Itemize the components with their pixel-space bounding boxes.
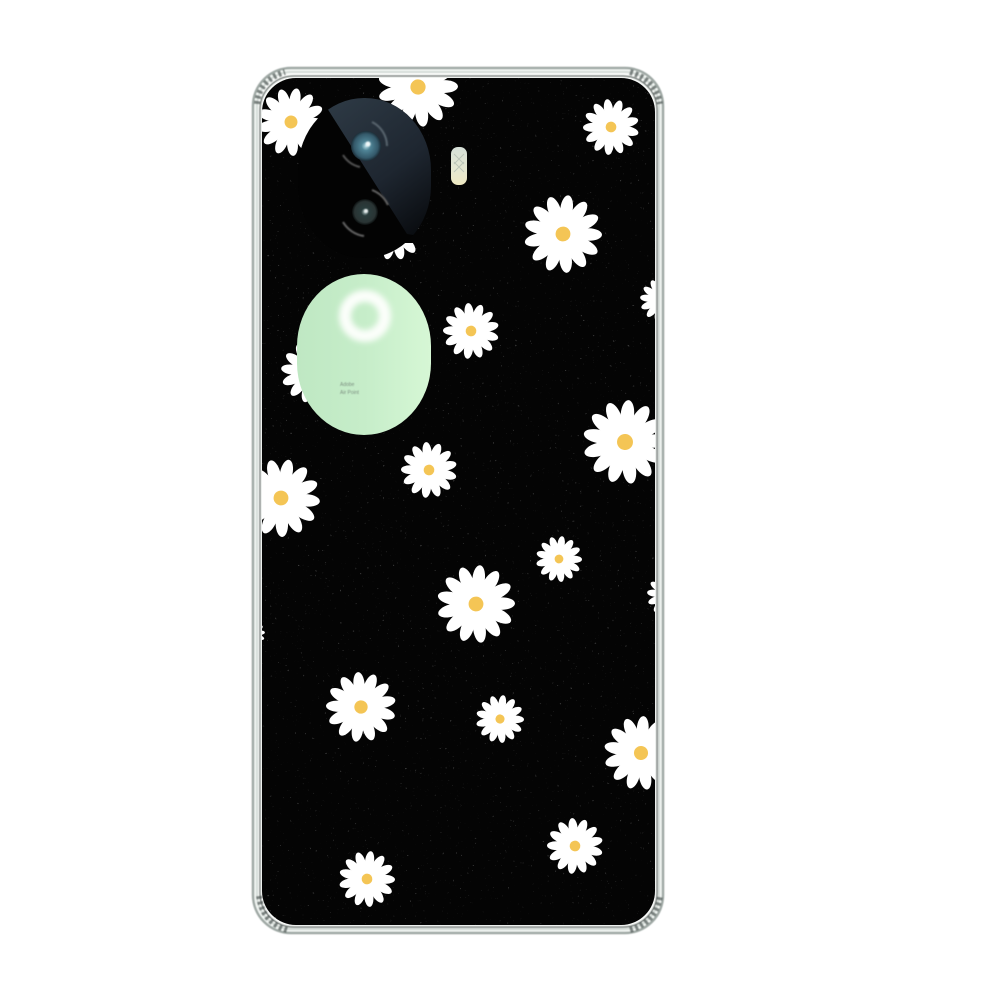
daisy under green disc — [281, 344, 308, 402]
green oval module — [297, 274, 431, 435]
tiny module text: Air Point — [340, 390, 360, 396]
upper lens — [343, 122, 387, 167]
glowing ring — [345, 296, 385, 336]
daisy pattern — [262, 78, 655, 907]
camera island — [298, 98, 431, 256]
transparent case frame — [253, 68, 663, 933]
daisy right edge middle — [647, 582, 655, 612]
flash LED — [451, 147, 467, 185]
daisy top right — [583, 99, 638, 155]
daisy top left — [262, 88, 322, 156]
daisy centre small — [401, 442, 456, 498]
daisy centre large — [438, 565, 515, 643]
phone case product illustration — [251, 66, 665, 935]
daisy lower left — [326, 672, 396, 742]
daisy right edge upper — [640, 280, 655, 320]
daisy bottom left — [340, 851, 395, 907]
daisy upper right large — [524, 195, 602, 273]
daisy right large — [584, 400, 655, 484]
daisy under camera — [384, 243, 416, 260]
corner bumpers — [257, 72, 660, 930]
daisy top centre — [378, 78, 458, 127]
daisy centre right small — [536, 536, 582, 582]
tiny module text — [340, 382, 360, 396]
black printed back panel — [262, 78, 655, 925]
daisy beside green disc — [443, 303, 498, 359]
daisy lower centre — [476, 695, 524, 743]
daisy lower right — [604, 716, 655, 790]
speckle texture — [262, 78, 655, 925]
daisy bottom right — [547, 818, 602, 874]
daisy left edge fragment — [262, 626, 265, 640]
lower lens — [343, 190, 388, 236]
daisy left edge — [262, 460, 320, 537]
glass reflection — [328, 98, 431, 235]
tiny module text: Adobe — [340, 382, 355, 388]
